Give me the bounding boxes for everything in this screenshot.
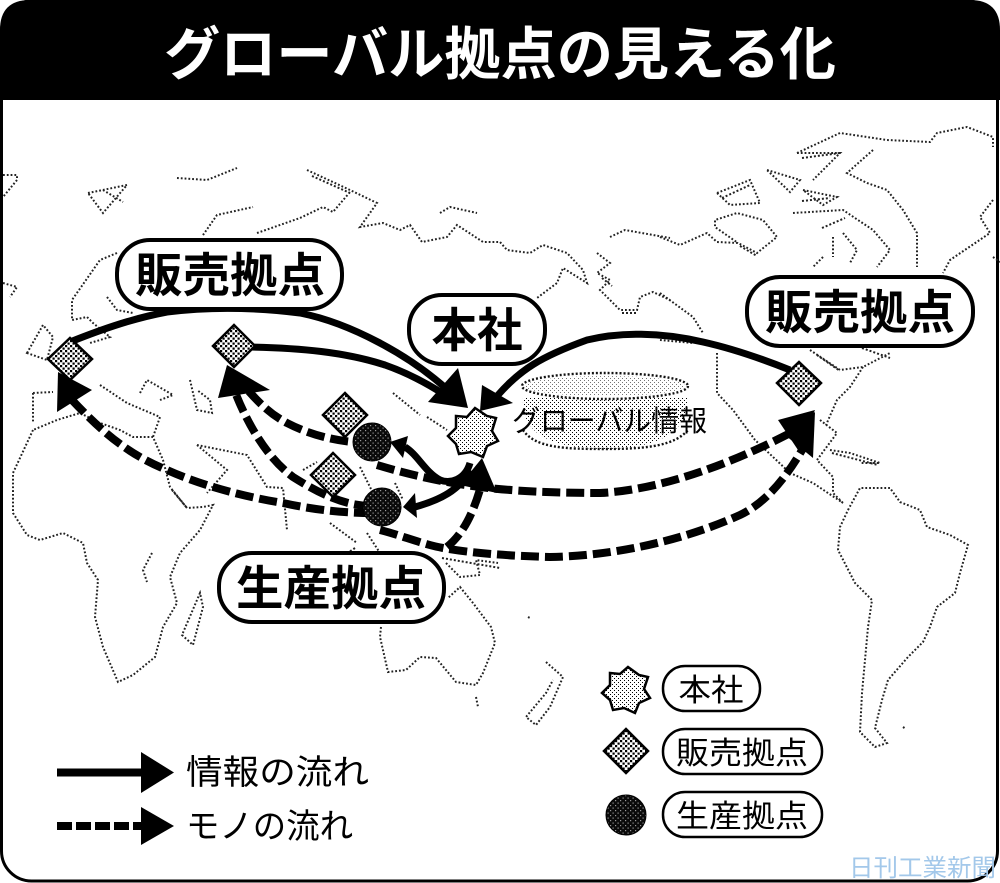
arrow: goods flow bbox=[57, 807, 174, 845]
legend sales base label bbox=[663, 729, 822, 774]
legend headquarters icon bbox=[602, 667, 650, 713]
watermark: publisher: 日刊工業新聞 bbox=[849, 855, 996, 882]
global information database bbox=[522, 373, 688, 449]
legend headquarters label: 本社 bbox=[678, 673, 744, 708]
callout: sales base left: 販売拠点 bbox=[135, 249, 325, 302]
legend headquarters label bbox=[663, 666, 760, 711]
title: グローバル拠点の見える化 bbox=[164, 23, 836, 87]
arrow: information flow bbox=[57, 752, 174, 793]
label: global information: グローバル情報 bbox=[512, 405, 707, 438]
callout: headquarters: 本社 bbox=[432, 304, 522, 357]
headquarters star bbox=[448, 408, 498, 457]
map stipple clusters bbox=[172, 153, 890, 568]
sales base markers bbox=[48, 325, 821, 497]
label: information flow: 情報の流れ bbox=[186, 754, 369, 792]
legend: flow types bbox=[57, 752, 369, 846]
legend sales base icon bbox=[604, 729, 648, 773]
callout: production base bbox=[219, 553, 444, 622]
callout: production base: 生産拠点 bbox=[236, 562, 426, 615]
title bar bbox=[0, 0, 1000, 100]
production base markers bbox=[353, 423, 401, 526]
arrowheads bbox=[57, 365, 815, 518]
callout: sales base left bbox=[117, 240, 342, 309]
label: goods flow: モノの流れ bbox=[186, 808, 353, 846]
arrow: information flows solid bbox=[70, 308, 790, 507]
callout: sales base right bbox=[747, 277, 973, 346]
callout: sales base right: 販売拠点 bbox=[765, 286, 955, 339]
legend production base icon bbox=[606, 795, 646, 835]
arrow: goods flows dashed bbox=[72, 388, 805, 557]
legend: base types bbox=[602, 666, 822, 837]
legend production base label: 生産拠点 bbox=[676, 799, 808, 834]
legend sales base label: 販売拠点 bbox=[676, 736, 808, 771]
world map bbox=[3, 127, 1000, 747]
legend production base label bbox=[663, 792, 822, 837]
callout: headquarters bbox=[409, 295, 545, 364]
